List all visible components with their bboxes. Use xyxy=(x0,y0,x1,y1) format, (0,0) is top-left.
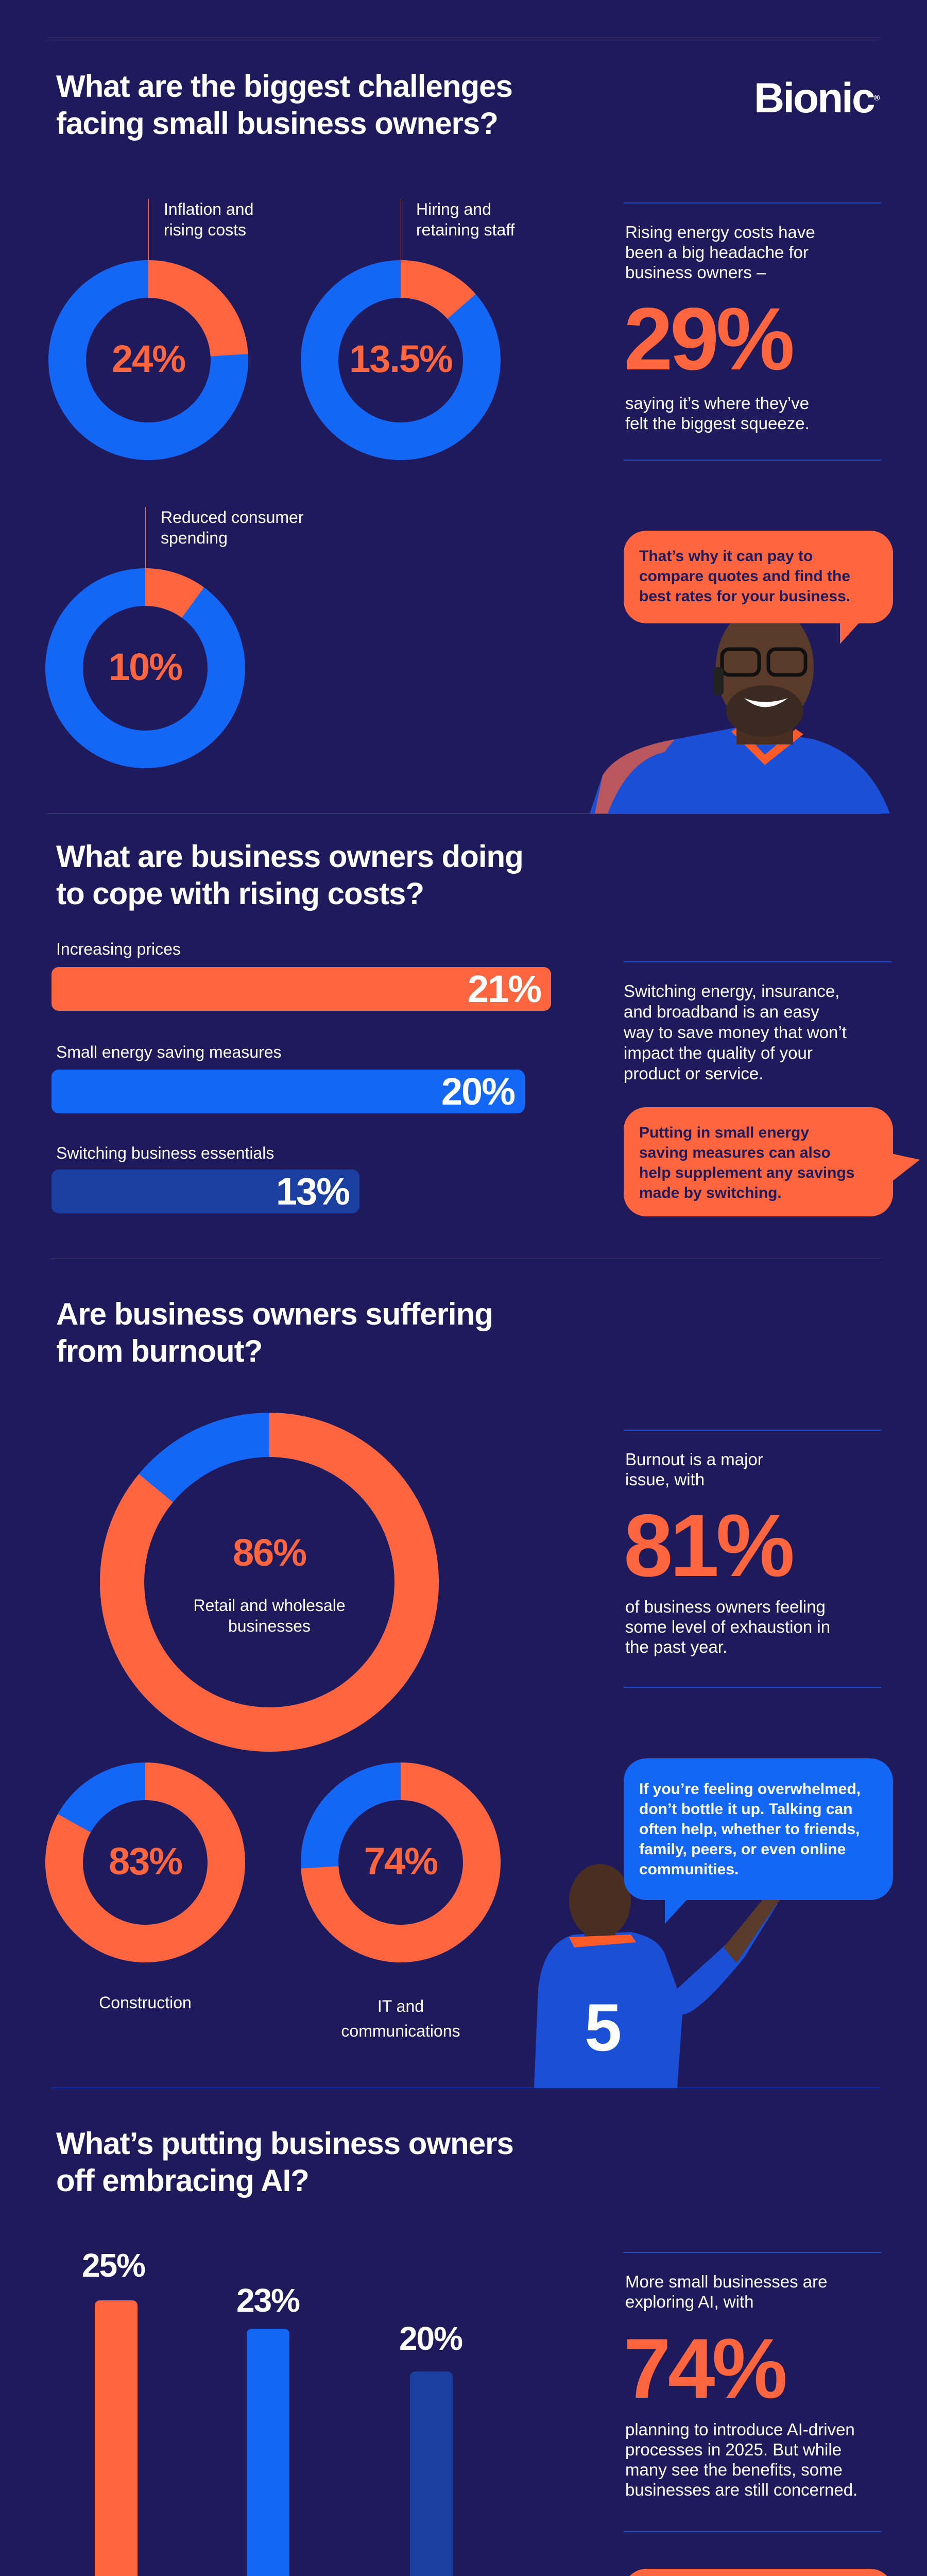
callout: energy saving: help supplement any savings xyxy=(639,1164,854,1181)
bar chart: coping measures: Increasing prices xyxy=(56,940,181,958)
donut: construction 83% xyxy=(45,1762,245,2012)
donut: inflation 24%: Inflation and xyxy=(164,200,253,218)
logo: Bionic: Bionic® xyxy=(754,75,878,122)
donut: inflation 24% xyxy=(48,199,253,460)
donut: consumer spending 10%: 10% xyxy=(109,646,182,688)
title: challenges: facing small business owners? xyxy=(56,106,498,141)
stat: energy 29%: business owners – xyxy=(625,263,766,282)
text: switching: way to save money that won’t xyxy=(624,1023,847,1042)
stat: energy 29%: 29% xyxy=(624,290,792,388)
stat: burnout 81%: issue, with xyxy=(625,1470,705,1489)
stat: energy 29%: been a big headache for xyxy=(625,243,809,262)
stat: burnout 81%: some level of exhaustion in xyxy=(625,1617,830,1636)
stat: burnout 81%: of business owners feeling xyxy=(625,1597,826,1616)
bar chart: AI concerns: 20% xyxy=(399,2320,462,2357)
callout: energy saving: Putting in small energy xyxy=(639,1124,809,1141)
callout: energy saving: made by switching. xyxy=(639,1184,782,1201)
stat: AI 74%: 74% xyxy=(624,2321,784,2416)
callout: energy saving xyxy=(624,1107,893,1216)
text: switching: product or service. xyxy=(624,1064,763,1083)
callout: compare quotes xyxy=(624,531,893,623)
callout: talking helps xyxy=(624,1758,893,1900)
donut: IT 74%: IT and xyxy=(377,1997,424,2015)
title: AI: What’s putting business owners xyxy=(56,2126,513,2161)
stat: burnout 81%: the past year. xyxy=(625,1637,727,1656)
bar chart: AI concerns: 23% xyxy=(236,2282,299,2319)
title: AI: off embracing AI? xyxy=(56,2163,309,2198)
title: coping: to cope with rising costs? xyxy=(56,876,424,911)
callout: compare quotes: best rates for your business. xyxy=(639,588,850,605)
donut: inflation 24%: 24% xyxy=(112,337,185,380)
stat: AI 74%: More small businesses are xyxy=(625,2272,827,2291)
bar chart: coping measures: Switching business essentials xyxy=(56,1144,274,1162)
donut: retail 86%: businesses xyxy=(228,1617,311,1635)
stat: AI 74%: exploring AI, with xyxy=(625,2292,753,2311)
text: switching: impact the quality of your xyxy=(624,1043,813,1062)
bar chart: AI concerns: 25% xyxy=(82,2247,145,2284)
person: smiling agent xyxy=(590,623,890,814)
donut: inflation 24%: rising costs xyxy=(164,221,246,239)
stat: burnout 81% xyxy=(624,1430,881,1688)
stat: energy 29%: Rising energy costs have xyxy=(625,223,815,242)
stat: AI 74%: processes in 2025. But while xyxy=(625,2440,842,2459)
stat: AI 74%: businesses are still concerned. xyxy=(625,2480,857,2499)
stat: AI 74% xyxy=(624,2252,881,2532)
bar chart: coping measures xyxy=(52,940,551,1213)
donut: consumer spending 10%: Reduced consumer xyxy=(161,508,303,527)
stat: energy 29%: saying it’s where they’ve xyxy=(625,394,809,413)
donut: construction 83%: Construction xyxy=(99,1993,192,2012)
stat: AI 74%: planning to introduce AI-driven xyxy=(625,2420,855,2439)
stat: burnout 81%: Burnout is a major xyxy=(625,1450,763,1469)
person: pointing xyxy=(534,1864,780,2088)
title: burnout: from burnout? xyxy=(56,1334,262,1368)
callout: talking helps: don’t bottle it up. Talking can xyxy=(639,1801,852,1818)
donut: hiring 13.5%: retaining staff xyxy=(416,221,515,239)
donut: retail 86%: 86% xyxy=(233,1531,306,1574)
donut: hiring 13.5%: Hiring and xyxy=(416,200,491,218)
callout: talking helps: If you’re feeling overwhelmed, xyxy=(639,1781,861,1798)
text: switching xyxy=(624,961,891,1084)
donut: consumer spending 10% xyxy=(45,507,303,768)
bar chart: coping measures: 21% xyxy=(468,968,541,1010)
donut: IT 74% xyxy=(301,1762,501,2040)
title: challenges xyxy=(56,69,512,141)
bar chart: coping measures: 20% xyxy=(441,1070,514,1113)
bar chart: coping measures: 13% xyxy=(276,1170,349,1213)
stat: burnout 81%: 81% xyxy=(624,1496,792,1595)
title: coping xyxy=(56,839,523,911)
bar chart: coping measures: Small energy saving measures xyxy=(56,1043,282,1061)
title: challenges: What are the biggest challenges xyxy=(56,69,512,104)
callout: talking helps: family, peers, or even online xyxy=(639,1841,846,1858)
text: switching: Switching energy, insurance, xyxy=(624,981,839,1001)
callout: energy saving: saving measures can also xyxy=(639,1144,831,1161)
donut: retail 86%: Retail and wholesale xyxy=(193,1596,346,1615)
title: burnout: Are business owners suffering xyxy=(56,1297,493,1331)
callout: test AI xyxy=(624,2569,893,2576)
donut: IT 74%: communications xyxy=(341,2022,460,2040)
stat: energy 29%: felt the biggest squeeze. xyxy=(625,414,810,433)
title: coping: What are business owners doing xyxy=(56,839,523,874)
donut: hiring 13.5% xyxy=(301,199,515,460)
person: pointing: 5 xyxy=(585,1990,622,2065)
donut: retail 86% xyxy=(100,1413,439,1752)
callout: compare quotes: compare quotes and find the xyxy=(639,568,850,585)
title: burnout xyxy=(56,1297,493,1368)
text: switching: and broadband is an easy xyxy=(624,1002,819,1021)
bar chart: AI concerns xyxy=(82,2247,462,2576)
stat: AI 74%: many see the benefits, some xyxy=(625,2460,843,2479)
donut: IT 74%: 74% xyxy=(364,1840,437,1883)
callout: talking helps: often help, whether to friends, xyxy=(639,1821,860,1838)
donut: construction 83%: 83% xyxy=(109,1840,182,1883)
title: AI xyxy=(56,2126,513,2198)
donut: consumer spending 10%: spending xyxy=(161,529,228,547)
callout: compare quotes: That’s why it can pay to xyxy=(639,548,813,565)
stat: energy 29% xyxy=(624,202,881,461)
donut: hiring 13.5%: 13.5% xyxy=(349,337,452,380)
callout: talking helps: communities. xyxy=(639,1861,739,1878)
